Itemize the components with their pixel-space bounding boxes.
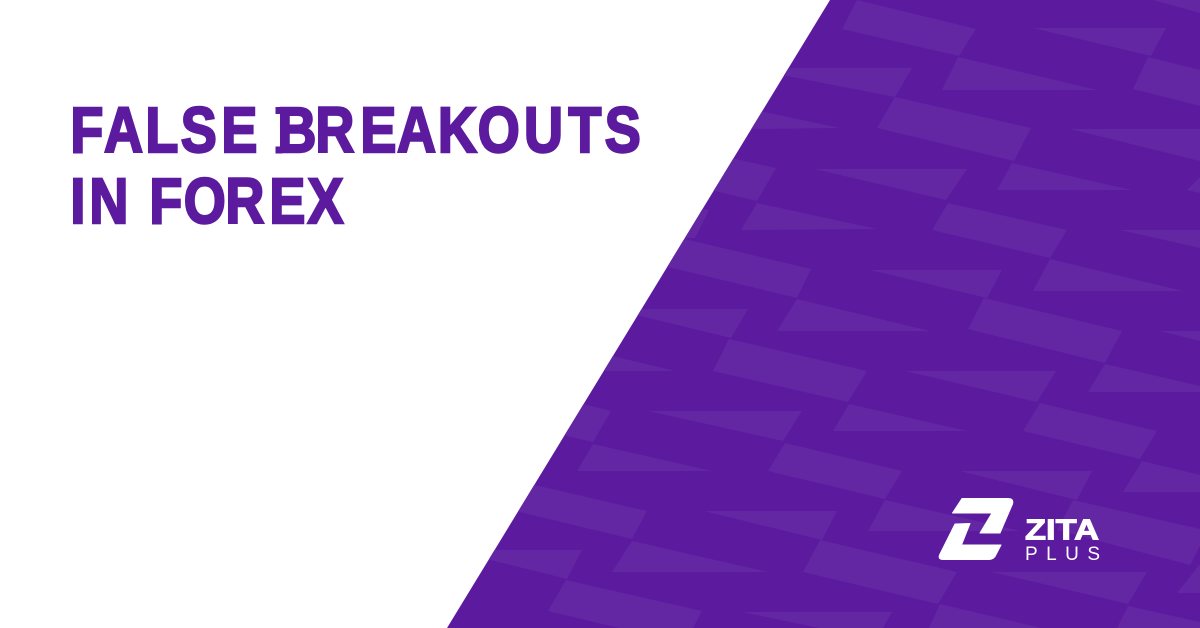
title lines	[70, 94, 641, 237]
logo: Zita Plus	[939, 498, 1100, 565]
geometric background pattern	[470, 0, 1200, 628]
logo wordmark ZITA: ZITA	[1025, 514, 1099, 546]
title line 2: IN FOREX	[70, 165, 344, 237]
title letter B serifs	[276, 107, 282, 154]
icon: Z mark	[939, 498, 1013, 560]
panel: purple diagonal background	[447, 0, 1200, 628]
logo wordmark PLUS: PLUS	[1025, 544, 1100, 565]
title	[70, 94, 641, 237]
title line 1: FALSE BREAKOUTS	[70, 94, 641, 166]
